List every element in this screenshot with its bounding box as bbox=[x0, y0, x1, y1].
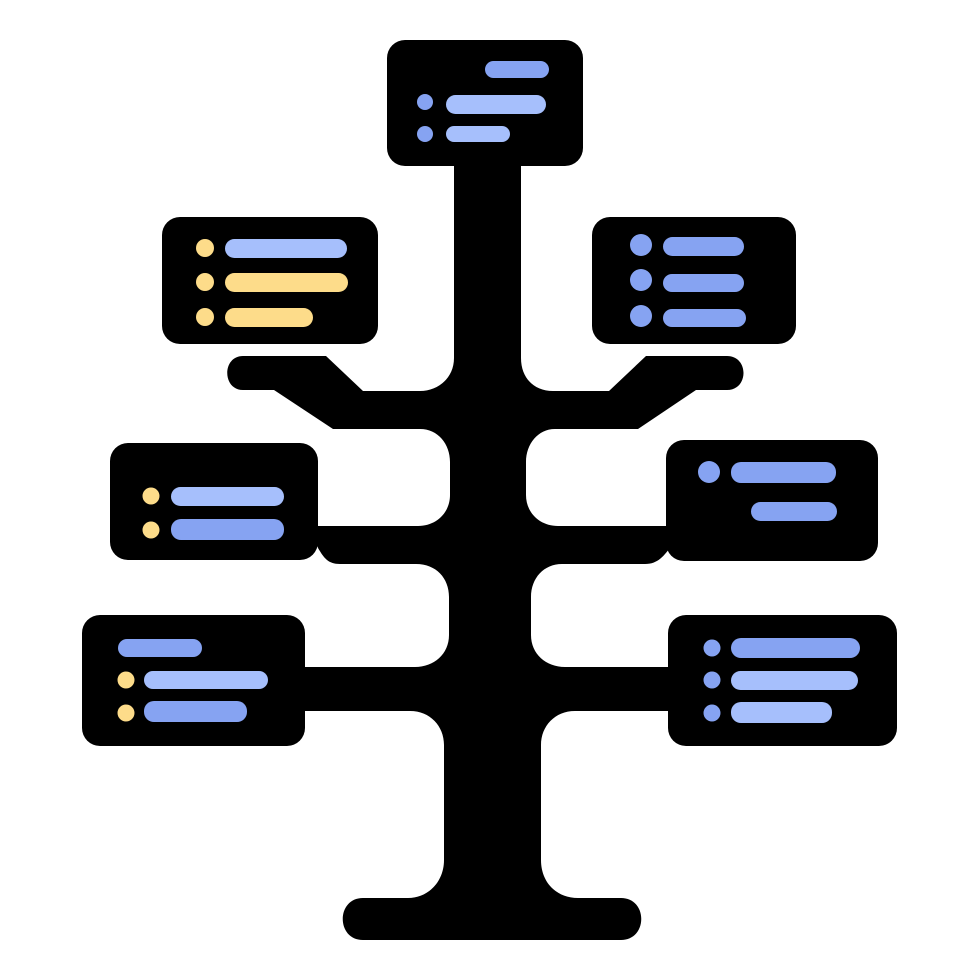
panel: top card bbox=[387, 40, 583, 166]
panel: upper left card bbox=[162, 217, 378, 344]
panel: lower right card bbox=[668, 615, 897, 746]
panel: middle left card bbox=[110, 443, 318, 560]
panel: lower left card bbox=[82, 615, 305, 746]
panel: upper right card bbox=[592, 217, 796, 344]
tree trunk and branches bbox=[227, 150, 744, 940]
panel: middle right card bbox=[666, 440, 878, 561]
